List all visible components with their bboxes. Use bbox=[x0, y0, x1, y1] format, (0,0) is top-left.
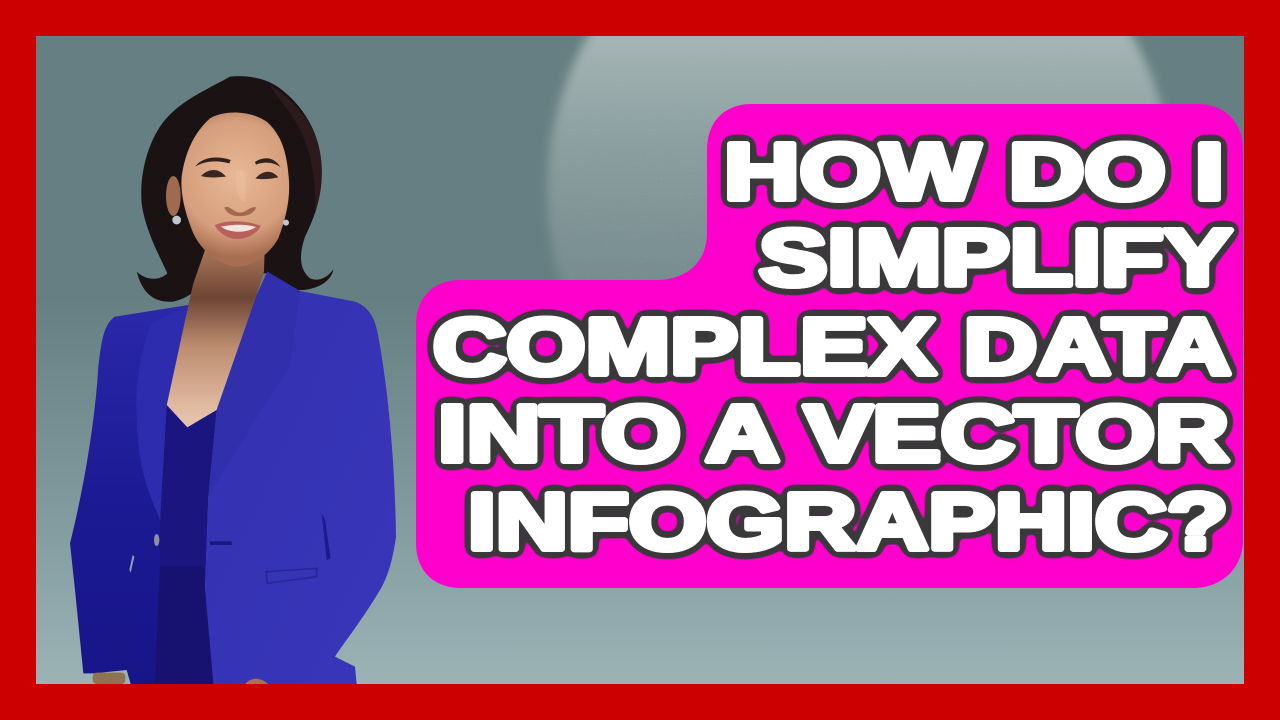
left body and arm bbox=[70, 305, 188, 684]
title text bbox=[433, 127, 1232, 566]
title text: SIMPLIFY bbox=[759, 213, 1232, 302]
title text: INFOGRAPHIC? bbox=[468, 477, 1228, 566]
watch bbox=[93, 673, 125, 684]
breast slit bbox=[210, 541, 232, 545]
inner top bbox=[155, 405, 217, 684]
portrait: woman in blue blazer bbox=[70, 76, 396, 684]
title text: COMPLEX DATA bbox=[433, 302, 1231, 391]
gap between arm and body bbox=[129, 555, 134, 573]
earrings bbox=[172, 216, 289, 226]
blazer bbox=[70, 272, 396, 684]
ear bbox=[166, 176, 181, 216]
eyebrows bbox=[195, 158, 281, 167]
right lapel bbox=[208, 272, 300, 497]
magenta background shape bbox=[416, 104, 1243, 588]
head bbox=[166, 112, 289, 267]
left lapel bbox=[136, 305, 188, 520]
eyes bbox=[201, 170, 278, 179]
nose bbox=[224, 207, 256, 216]
neck and chest bbox=[167, 250, 265, 427]
hand bbox=[245, 679, 268, 684]
hair bbox=[137, 76, 333, 302]
pocket bbox=[266, 568, 317, 583]
sleeve shadow bbox=[322, 513, 331, 560]
button bbox=[154, 534, 159, 546]
title text: HOW DO I bbox=[724, 127, 1224, 216]
lips and smile bbox=[215, 221, 261, 239]
title text: INTO A VECTOR bbox=[438, 389, 1229, 478]
face bbox=[181, 112, 289, 267]
right panel and sleeve bbox=[205, 272, 396, 684]
title panel bbox=[416, 104, 1243, 588]
